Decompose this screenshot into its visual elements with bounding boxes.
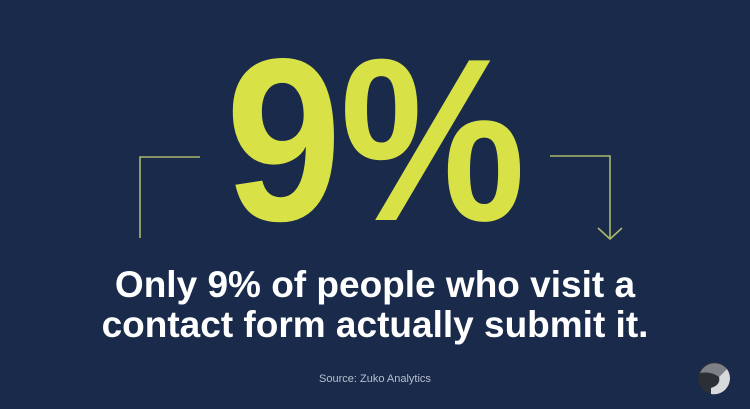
statement text: contact form actually submit it. xyxy=(102,304,648,345)
statement text: Only 9% of people who visit a xyxy=(115,264,635,305)
icon: logo xyxy=(698,362,730,394)
headline number: 9% xyxy=(226,11,524,270)
source: Source: Zuko Analytics xyxy=(319,373,431,385)
statement text xyxy=(102,264,648,345)
